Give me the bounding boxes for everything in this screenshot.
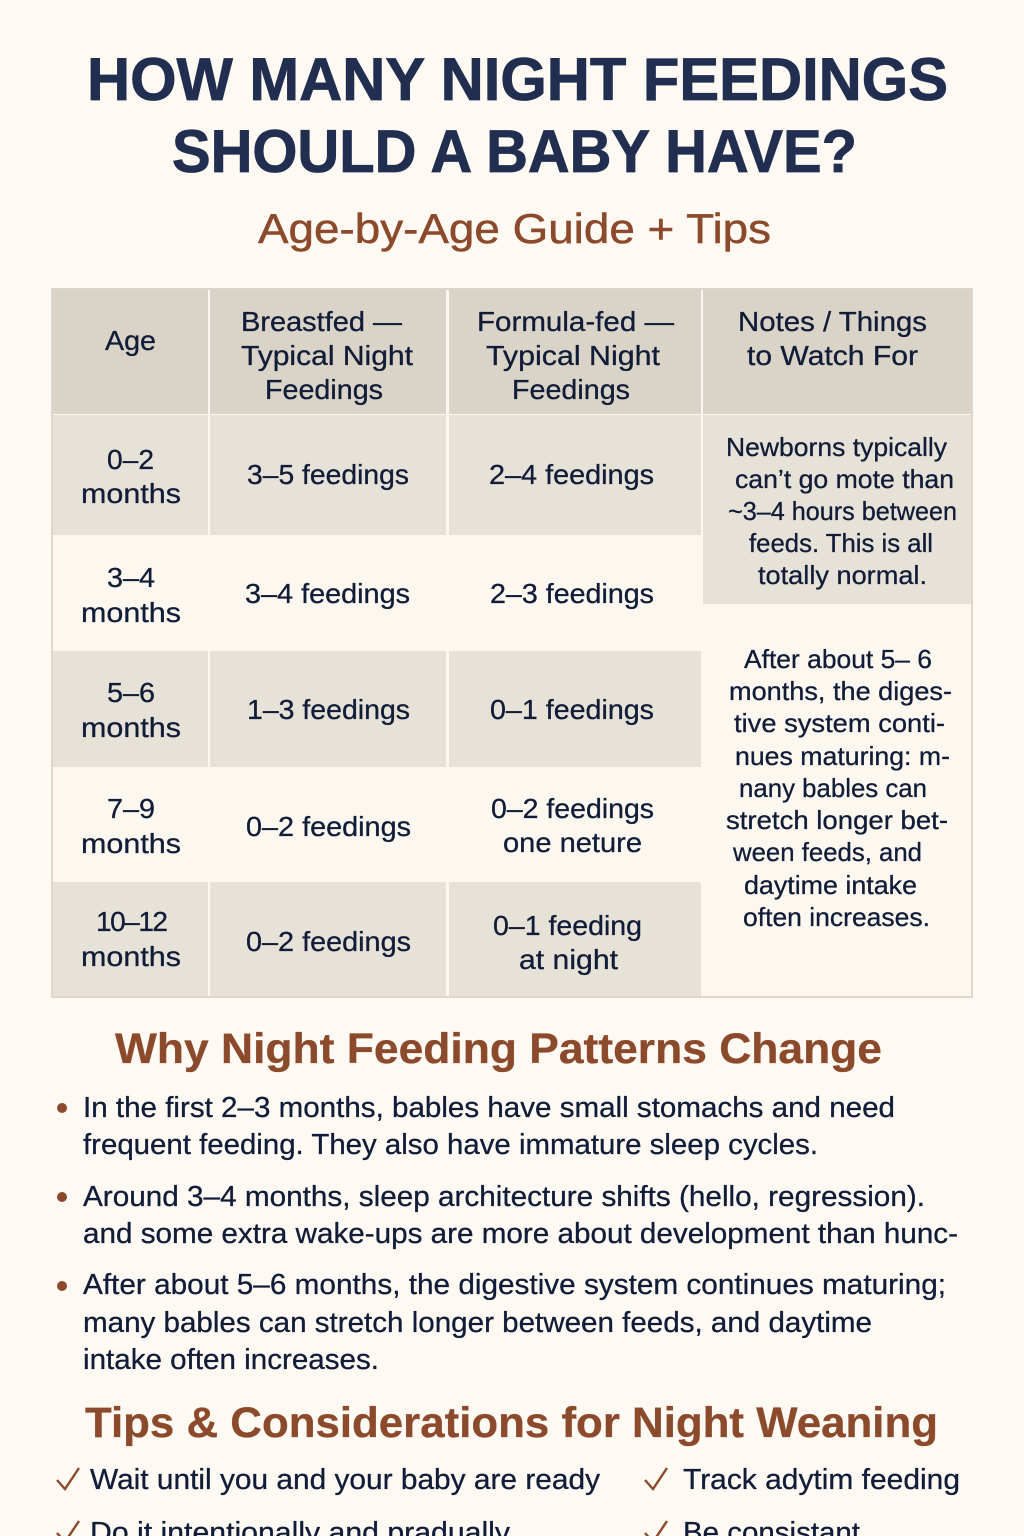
row: 5-6 months: months — [81, 712, 181, 743]
note: newborns: Newborns typically — [726, 432, 947, 462]
tip: wait until ready: Wait until you and your baby are ready — [90, 1464, 601, 1496]
note: newborns: totally normal. — [758, 560, 927, 590]
note: newborns: can’t go mote than — [735, 464, 954, 494]
row: 5-6 months: 5–6 — [107, 677, 155, 708]
row: 7-9 months: 7–9 — [107, 793, 155, 824]
row: 0-2 months: months — [81, 478, 181, 509]
header row: Formula-fed — — [477, 306, 674, 337]
note: newborns: ~3–4 hours between — [728, 496, 957, 526]
note: after 5-6 months: nany bables can — [739, 773, 927, 803]
row: 7-9 months: 0–2 feedings — [246, 811, 411, 842]
note: after 5-6 months: ween feeds, and — [732, 837, 922, 867]
bullet 3: After about 5–6 months, the digestive system continues maturing; — [83, 1269, 946, 1301]
bullet 1: In the first 2–3 months, bables have small stomachs and need — [83, 1092, 895, 1124]
row: 0-2 months — [53, 415, 701, 535]
bullet 2: Around 3–4 months, sleep architecture shifts (hello, regression). — [83, 1181, 925, 1213]
title: HOW MANY NIGHT FEEDINGS — [87, 46, 948, 113]
row: 3-4 months: 3–4 — [107, 562, 155, 593]
note: after 5-6 months: months, the diges- — [729, 676, 952, 706]
heading: tips: Tips & Considerations for Night Weaning — [85, 1399, 938, 1447]
row: 10-12 months: 0–2 feedings — [246, 926, 411, 957]
note: newborns: feeds. This is all — [749, 528, 933, 558]
bullet 2: and some extra wake-ups are more about development than hunc- — [83, 1218, 958, 1250]
note: after 5-6 months: often increases. — [743, 902, 930, 932]
row: 10-12 months: months — [81, 941, 181, 972]
row: 3-4 months: months — [81, 597, 181, 628]
title — [87, 46, 948, 185]
row: 3-4 months — [81, 562, 654, 628]
heading: why patterns change: Why Night Feeding Patterns Change — [115, 1025, 882, 1073]
note: after 5-6 months: nues maturing: m- — [735, 741, 950, 771]
note: after 5-6 months: tive system conti- — [734, 708, 945, 738]
bullet 3: intake often increases. — [83, 1344, 379, 1376]
note: after 5-6 months: stretch longer bet- — [726, 805, 948, 835]
header row: Notes / Things — [738, 306, 927, 337]
bullet 1: frequent feeding. They also have immature sleep cycles. — [83, 1129, 818, 1161]
row: 10-12 months — [53, 882, 701, 996]
row: 0-2 months: 2–4 feedings — [489, 459, 654, 490]
row: 10-12 months: 0–1 feeding — [493, 910, 642, 941]
bullet list: reasons — [57, 1092, 958, 1376]
header row: to Watch For — [747, 340, 918, 371]
row: 10-12 months: at night — [519, 944, 618, 975]
header row: Age — [105, 325, 156, 356]
row: 7-9 months: one neture — [503, 827, 642, 858]
table background — [52, 289, 972, 997]
row: 10-12 months: 10–12 — [96, 906, 168, 937]
row: 3-4 months: 2–3 feedings — [490, 578, 654, 609]
row: 3-4 months: 3–4 feedings — [245, 578, 410, 609]
note: newborns — [703, 415, 971, 604]
row: 7-9 months: 0–2 feedings — [491, 793, 654, 824]
bullet 1 — [57, 1092, 895, 1161]
row: 5-6 months — [53, 651, 701, 767]
title: SHOULD A BABY HAVE? — [172, 118, 857, 185]
tip: track feeding: Track adytim feeding — [683, 1464, 960, 1496]
row: 7-9 months — [81, 793, 654, 859]
row: 5-6 months: 1–3 feedings — [247, 694, 410, 725]
row: 5-6 months: 0–1 feedings — [490, 694, 654, 725]
row: 7-9 months: months — [81, 828, 181, 859]
note: after 5-6 months: daytime intake — [744, 870, 917, 900]
checklist: tips — [57, 1464, 960, 1536]
header row — [52, 289, 972, 414]
table: night feedings by age — [52, 289, 972, 997]
header row: Feedings — [512, 374, 630, 405]
bullet 2 — [57, 1181, 958, 1250]
note: after 5-6 months: After about 5– 6 — [744, 644, 932, 674]
header row: Typical Night — [486, 340, 660, 371]
bullet 3: many bables can stretch longer between feeds, and daytime — [83, 1307, 872, 1339]
subtitle: Age-by-Age Guide + Tips — [258, 205, 771, 252]
note: after 5-6 months — [726, 644, 952, 932]
header row: Breastfed — — [241, 306, 402, 337]
header row: Typical Night — [241, 340, 413, 371]
bullet 3 — [57, 1269, 946, 1376]
row: 0-2 months: 3–5 feedings — [247, 459, 409, 490]
row: 0-2 months: 0–2 — [107, 444, 154, 475]
header row: Feedings — [265, 374, 383, 405]
